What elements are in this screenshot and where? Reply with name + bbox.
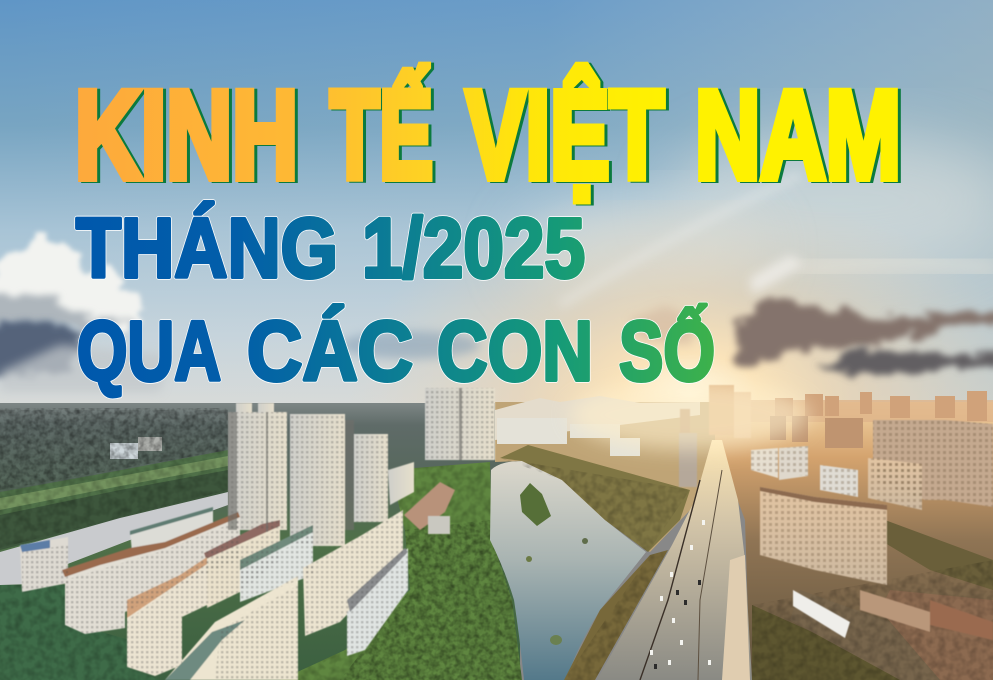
subtitle line 2 white outline: SỐ xyxy=(619,304,715,398)
subtitle line 2 white outline: QUA xyxy=(77,304,221,398)
lake xyxy=(490,461,646,680)
subtitle line 2 fill xyxy=(77,304,715,398)
subtitle line 2 white outline: CON xyxy=(437,304,593,398)
title shadow: NAM xyxy=(698,67,904,206)
subtitle line 1 white outline xyxy=(76,201,585,295)
subtitle line 1 white outline: 1/2025 xyxy=(362,201,585,295)
subtitle line 2 white outline: CÁC xyxy=(247,304,413,398)
title fill: KINH xyxy=(75,66,298,205)
right-side apartment towers xyxy=(679,385,993,640)
title fill: NAM xyxy=(695,66,901,205)
central tree belt xyxy=(280,462,522,680)
title shadow: VIỆT xyxy=(469,67,667,206)
subtitle line 2 white outline xyxy=(77,304,715,398)
title shadow xyxy=(78,67,904,206)
sun glow over the city xyxy=(570,380,810,450)
subtitle: THÁNG 1/2025 xyxy=(76,201,585,295)
river xyxy=(0,492,228,585)
highway xyxy=(597,440,752,680)
left apartment complex xyxy=(20,388,495,680)
ground: left side with river and far city xyxy=(0,403,520,680)
subtitle line 1 fill xyxy=(76,201,585,295)
subtitle line 2 fill: QUA xyxy=(77,304,221,398)
subtitle line 1 fill: 1/2025 xyxy=(362,201,585,295)
subtitle line 2 fill: CON xyxy=(437,304,593,398)
sky background xyxy=(0,0,993,425)
subtitle line 1 fill: THÁNG xyxy=(76,201,338,295)
title shadow: KINH xyxy=(78,67,301,206)
subtitle line 1 white outline: THÁNG xyxy=(76,201,338,295)
subtitle line 2 fill: CÁC xyxy=(247,304,413,398)
distant skyline xyxy=(495,391,993,456)
title fill: TẾ xyxy=(330,66,433,205)
title: KINH TẾ VIỆT NAM xyxy=(75,66,904,206)
title fill xyxy=(75,66,901,205)
forest lower left xyxy=(0,585,160,680)
title fill: VIỆT xyxy=(466,66,664,205)
texture of right-side trees and rooftops xyxy=(500,458,993,680)
title shadow: TẾ xyxy=(333,67,436,206)
subtitle line 2 fill: SỐ xyxy=(619,304,715,398)
clouds xyxy=(0,175,993,392)
light speckle of far city and leaves xyxy=(0,408,522,680)
foliage texture xyxy=(0,410,522,680)
subtitle: QUA CÁC CON SỐ xyxy=(77,304,715,398)
ground: right side with warm haze xyxy=(495,402,993,680)
